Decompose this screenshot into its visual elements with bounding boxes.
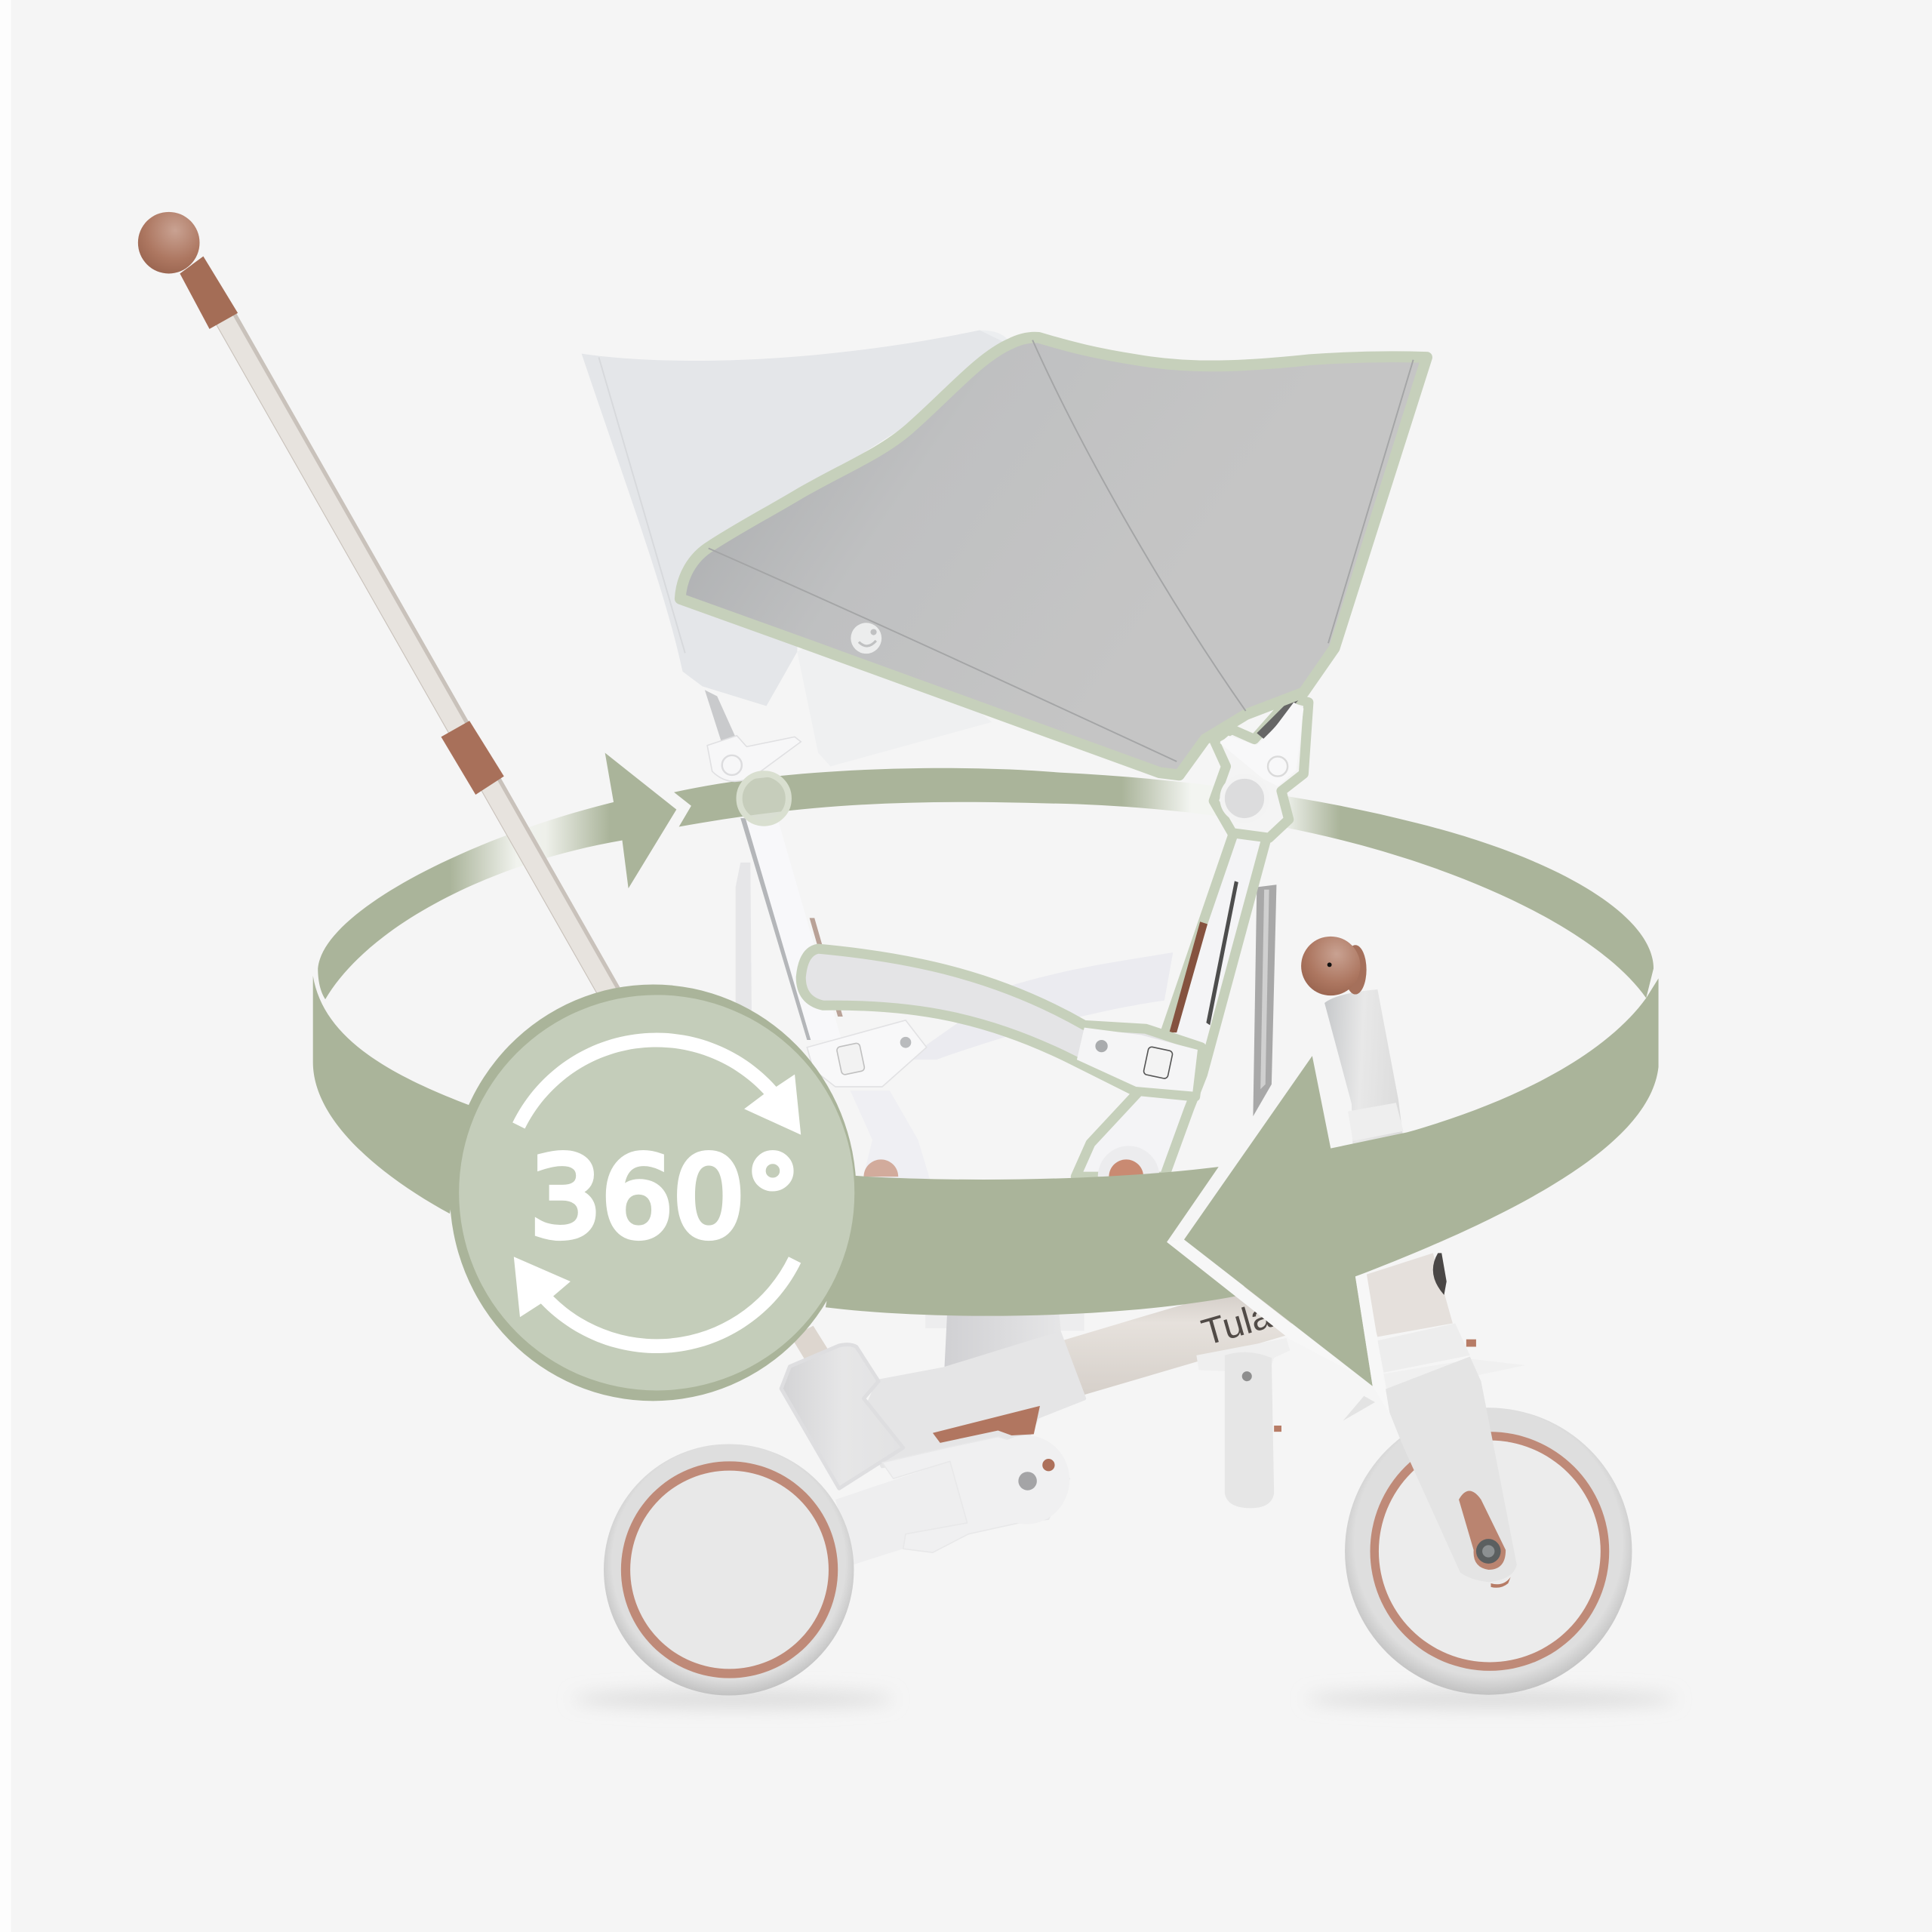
rotation ring: rear band left section with arrowhead (318, 753, 676, 999)
brake fins (1343, 1396, 1375, 1420)
seat frame: left lower bracket (807, 1020, 931, 1180)
badge outer ring (450, 984, 857, 1401)
ghost canopy: rotated-away position (582, 331, 1023, 767)
rotation ring: front right section with big arrowhead (1184, 978, 1659, 1386)
badge inner disc (459, 995, 854, 1390)
brown accent wedge (933, 1406, 1040, 1443)
canopy seams (709, 340, 1414, 761)
main body (863, 1334, 1084, 1466)
front steering stem and handle (1301, 937, 1404, 1152)
fork leg (1383, 1357, 1517, 1582)
axle hub (1476, 1539, 1501, 1564)
seat post (944, 1306, 1062, 1380)
seat frame: right upper joint and bracket (1214, 696, 1309, 838)
rotation ring: rear band right section (674, 768, 1654, 998)
front wheel (1345, 1407, 1632, 1695)
rotation ring: front centre section (826, 1167, 1236, 1316)
front fork and stem lower part (1343, 1253, 1525, 1588)
stem collar (1348, 1103, 1404, 1141)
seat frame: rear crossbar (906, 952, 1173, 1060)
seat frame: left ghost strut (705, 690, 843, 1040)
metal rod behind right strut (1253, 884, 1276, 1116)
main canopy (680, 337, 1427, 775)
rotation ring: front left section (313, 976, 469, 1214)
canopy logo (851, 623, 881, 654)
clockwise arrow bottom (514, 1257, 801, 1353)
stem clamp (1377, 1323, 1470, 1373)
push handle upper pole (138, 212, 611, 995)
lower pole section (791, 1326, 838, 1377)
ground shadows (573, 1690, 1675, 1708)
pole socket (781, 1345, 903, 1488)
rear swing arm (835, 1461, 968, 1564)
tiny pin (1466, 1340, 1476, 1346)
arrow background gap (1167, 1239, 1355, 1374)
rear wheel (604, 1444, 854, 1696)
seat frame: right strut with green outline (1075, 820, 1272, 1177)
handle collar (441, 721, 504, 795)
footrest arm (1196, 1338, 1290, 1508)
frame beam with brand name (1062, 1275, 1294, 1395)
axle slot (1459, 1491, 1506, 1570)
clockwise arrow top (512, 1033, 801, 1135)
stem logo (1433, 1253, 1447, 1295)
left edge strip (0, 0, 11, 1932)
steering knob (1344, 945, 1367, 995)
rear body housing (781, 1306, 1084, 1564)
armrest handlebar with green outline (801, 949, 1201, 1097)
badge text: 360° (530, 1134, 801, 1263)
brand text: Tula (1198, 1295, 1277, 1353)
hub cover (882, 1437, 1069, 1552)
pivot hub (983, 1435, 1069, 1524)
360 degree badge (450, 984, 857, 1401)
seat post tabs (925, 1306, 1084, 1331)
handle grip (180, 257, 238, 329)
arrow white gap (1355, 1273, 1390, 1414)
handle knob (138, 212, 199, 273)
